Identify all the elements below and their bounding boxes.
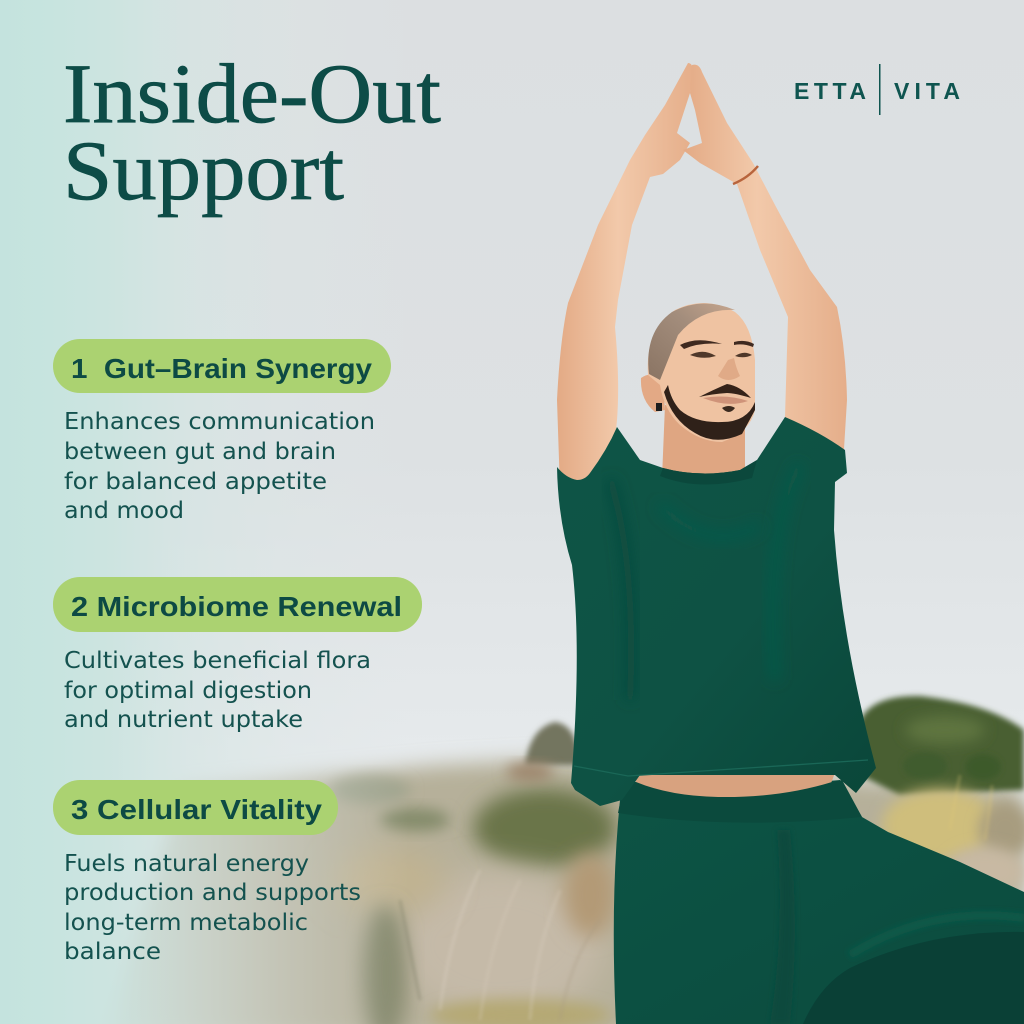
body text 1: between gut and brain xyxy=(64,437,336,465)
body text 1: Enhances communication xyxy=(64,407,375,435)
title: Support xyxy=(63,124,344,218)
shirt xyxy=(557,417,876,806)
body text 3: Fuels natural energy xyxy=(64,849,309,877)
body text 3 xyxy=(64,849,361,965)
pill heading 1 xyxy=(53,339,391,393)
logo: Etta Vita: VITA xyxy=(894,78,960,104)
pill heading 1: 1 Gut–Brain Synergy xyxy=(71,353,372,384)
eyes xyxy=(690,352,752,358)
body text 2: and nutrient uptake xyxy=(64,705,303,733)
right arm and hand xyxy=(683,65,847,480)
title xyxy=(63,47,441,218)
head xyxy=(648,303,755,442)
body text 1: and mood xyxy=(64,496,184,524)
body text 2: Cultivates beneficial flora xyxy=(64,646,371,674)
pants xyxy=(614,780,1024,1024)
bracelet xyxy=(733,166,758,184)
waistband xyxy=(618,780,862,823)
body text 1 xyxy=(64,407,375,524)
title: Inside-Out xyxy=(63,47,441,141)
pill heading 2 xyxy=(53,577,422,632)
body text 3: long-term metabolic xyxy=(64,908,308,936)
leg fold shadows xyxy=(803,932,1024,1024)
body text 3: production and supports xyxy=(64,878,361,906)
ear xyxy=(641,374,665,412)
mustache and lips xyxy=(699,384,751,398)
person xyxy=(557,63,1024,1024)
body text 2: for optimal digestion xyxy=(64,676,312,704)
nose shadow xyxy=(718,358,740,380)
background: left mint gradient overlay xyxy=(0,0,620,1024)
shaved hair xyxy=(648,303,735,380)
pill heading 3 xyxy=(53,780,338,835)
collar xyxy=(660,460,757,485)
body text 3: balance xyxy=(64,937,161,965)
section 1: Gut-Brain Synergy xyxy=(53,339,391,524)
eyebrows xyxy=(680,340,754,349)
neck xyxy=(662,405,745,478)
body text 1: for balanced appetite xyxy=(64,467,327,495)
section 3: Cellular Vitality xyxy=(53,780,361,965)
pill heading 2: 2 Microbiome Renewal xyxy=(71,591,402,622)
logo: Etta Vita: ETTA xyxy=(794,78,866,104)
pill heading 3: 3 Cellular Vitality xyxy=(71,794,322,825)
bare midriff xyxy=(632,770,836,800)
left arm and hand xyxy=(557,63,693,490)
hem line xyxy=(574,760,868,776)
beard xyxy=(664,385,755,440)
background: blurred hillside landscape xyxy=(100,696,1024,1024)
logo: Etta Vita xyxy=(794,64,960,115)
body text 2 xyxy=(64,646,371,733)
section 2: Microbiome Renewal xyxy=(53,577,422,733)
shirt fold xyxy=(610,480,631,700)
